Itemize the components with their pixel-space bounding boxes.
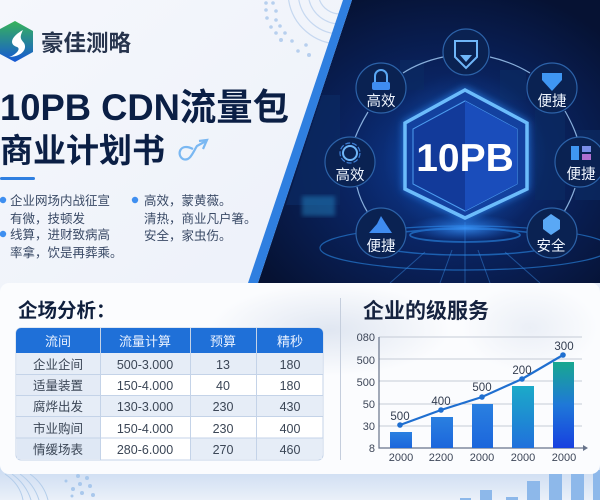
bottom background — [0, 465, 600, 500]
node: upper right 便捷 — [527, 63, 577, 113]
table rows: 500-3.000 — [117, 358, 173, 372]
table header: 精秒 — [277, 334, 303, 349]
node: upper left 高效: 高效 — [366, 93, 396, 110]
bullet list left: 率拿，饮是再葬乘。 — [10, 245, 123, 260]
y axis labels: 500 — [357, 355, 375, 367]
y axis labels — [357, 332, 375, 455]
data labels: 300 — [554, 341, 574, 353]
y axis labels: 50 — [363, 399, 375, 411]
connecting ring — [355, 57, 577, 213]
table rows: 150-4.000 — [117, 379, 173, 393]
heading: 企业的级服务 — [363, 299, 489, 323]
y axis labels: 8 — [369, 443, 375, 455]
y axis labels: 500 — [357, 377, 375, 389]
node: middle right 便捷 — [555, 137, 600, 187]
node: lower left 便捷 — [356, 208, 406, 258]
table rows: 230 — [213, 422, 233, 436]
bullet list right: 高效，蒙黄薇。 — [144, 193, 232, 208]
bars — [390, 362, 574, 448]
heading: 企场分析： — [18, 299, 116, 322]
x axis labels — [389, 452, 576, 464]
x axis labels: 2200 — [429, 452, 453, 464]
node: lower right 安全 — [527, 208, 577, 258]
table header: 预算 — [210, 334, 236, 349]
x axis labels: 2000 — [470, 452, 494, 464]
icon: flourish — [180, 140, 207, 160]
table rows: 企业企间 — [33, 357, 83, 372]
trend line — [397, 352, 566, 428]
data labels: 500 — [472, 382, 492, 394]
panel: market analysis — [16, 299, 323, 460]
bullet list left: 有微，技顿发 — [10, 211, 86, 226]
title — [0, 87, 289, 169]
x axis labels: 2000 — [552, 452, 576, 464]
logo wordmark: 豪佳测略 — [41, 31, 132, 56]
table rows: 腐烨出发 — [33, 399, 83, 414]
table rows: 230 — [213, 400, 233, 414]
panel: bottom card — [0, 283, 600, 474]
bullet list left: 线算，进财致病高 — [10, 227, 110, 242]
decorative arcs — [289, 0, 340, 44]
y axis labels: 080 — [357, 332, 375, 344]
table rows: 180 — [280, 358, 300, 372]
table rows — [33, 357, 300, 457]
node: middle right 便捷: 便捷 — [566, 166, 596, 183]
data labels — [390, 341, 574, 423]
city skyline — [286, 60, 600, 205]
10PB label: 10PB — [416, 137, 514, 180]
table rows: 130-3.000 — [117, 400, 173, 414]
central hexagon badge — [403, 87, 529, 221]
table rows: 180 — [280, 379, 300, 393]
x axis labels: 2000 — [389, 452, 413, 464]
title underline — [0, 177, 35, 180]
title: 10PB CDN流量包 — [0, 87, 289, 128]
node: upper left 高效 — [356, 63, 406, 113]
title: 商业计划书 — [0, 132, 165, 169]
data labels: 200 — [512, 365, 532, 377]
node: middle left 高效 — [325, 137, 375, 187]
table rows: 430 — [280, 400, 300, 414]
data labels: 400 — [431, 396, 451, 408]
table rows: 40 — [216, 379, 230, 393]
node: upper right 便捷: 便捷 — [538, 93, 567, 110]
bullet list right: 清热，商业凡户箸。 — [144, 211, 257, 226]
node: lower right 安全: 安全 — [536, 237, 566, 255]
table rows: 适量装置 — [33, 379, 83, 393]
table rows: 情缓场表 — [33, 443, 83, 457]
table header — [45, 334, 303, 349]
panel: enterprise service chart — [340, 298, 588, 464]
table rows: 市业购间 — [33, 421, 83, 436]
table rows: 270 — [213, 443, 233, 457]
bullet list left — [0, 193, 123, 260]
table header: 流量计算 — [119, 334, 171, 349]
table rows: 280-6.000 — [117, 443, 173, 457]
logo — [0, 21, 132, 62]
table rows: 460 — [280, 443, 300, 457]
y axis labels: 30 — [363, 421, 375, 433]
node: lower left 便捷: 便捷 — [366, 238, 396, 255]
node: top shield — [443, 29, 489, 75]
table rows: 150-4.000 — [117, 422, 173, 436]
table header: 流间 — [45, 334, 71, 349]
dark tech panel — [248, 0, 600, 283]
bullet list left: 企业网场内战征宣 — [10, 193, 110, 208]
node: middle left 高效: 高效 — [336, 167, 365, 184]
table rows: 400 — [280, 422, 300, 436]
data labels: 500 — [390, 411, 410, 423]
icon: logo hexagon — [0, 21, 33, 62]
bullet list right: 安全，家虫伤。 — [144, 228, 232, 243]
x axis labels: 2000 — [511, 452, 535, 464]
table — [16, 328, 323, 460]
table rows: 13 — [216, 358, 230, 372]
bar chart — [357, 332, 588, 464]
bullet list right — [132, 193, 257, 243]
floor rings — [320, 226, 600, 270]
